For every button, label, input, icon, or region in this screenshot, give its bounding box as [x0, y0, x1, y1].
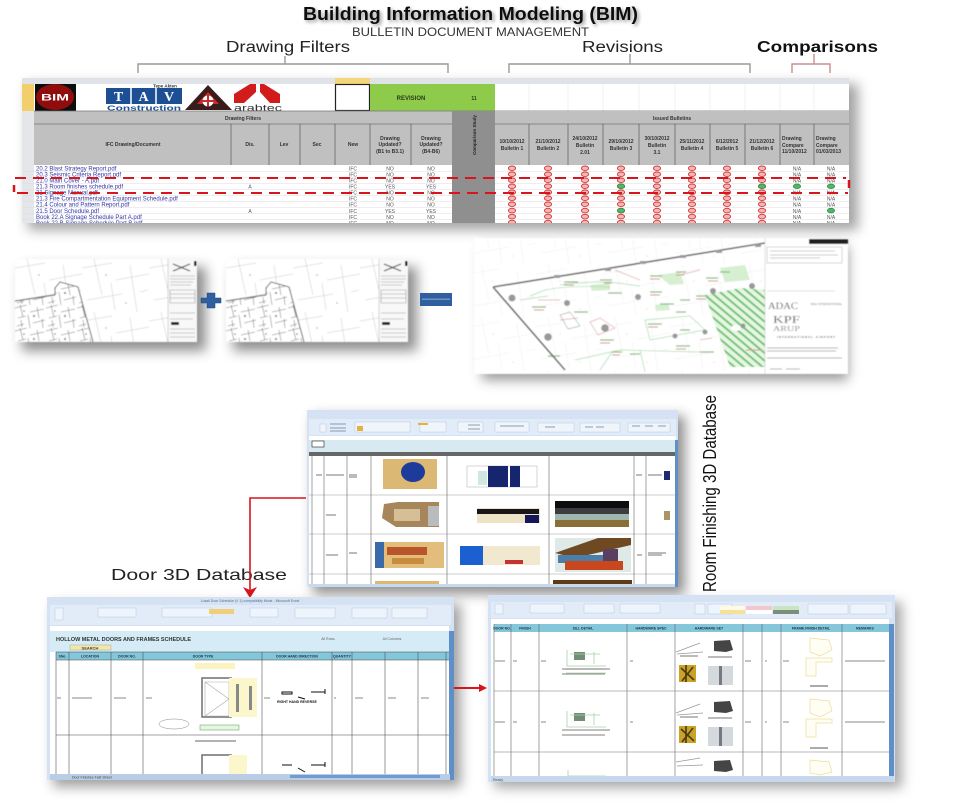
panel: room finishing spreadsheet: [307, 410, 685, 594]
title block: INTERNATIONAL AIRPORT: [777, 335, 835, 339]
table header: HARDWARE SET: [695, 626, 724, 630]
data rows: NO: [427, 196, 435, 202]
title block: BALI INTERNATIONAL: [811, 302, 842, 306]
room 3 images: [375, 538, 631, 572]
logo: CCC triangle: [185, 85, 232, 110]
data rows: 21.4 Colour and Pattern Report.pdf: [36, 202, 130, 208]
table header: issued bulletins: 21/10/2012: [535, 139, 561, 145]
table header: HARDWARE SPEC: [635, 626, 667, 630]
data rows: NO: [427, 166, 435, 172]
table header: issued bulletins: Bulletin 4: [681, 146, 703, 152]
data rows: IFC: [349, 178, 357, 184]
table header: drawing filters: Drawing: [380, 136, 400, 142]
panel: door schedule spreadsheet: Door Finishes Fast Street: [72, 776, 112, 780]
data rows: N/A: [793, 221, 802, 227]
data rows: Book 22.B Signage Schedule Part B.pdf: [36, 221, 143, 227]
heading: drawing filters with bracket: Drawing Filters: [226, 39, 350, 56]
data rows: N/A: [827, 190, 836, 196]
data rows: NO: [386, 215, 394, 221]
table header: issued bulletins: 6/12/2012: [716, 139, 738, 145]
panel: door finishes spreadsheet: Ready: [493, 778, 503, 782]
panel: door schedule spreadsheet: All Rows: [321, 637, 335, 641]
table header: DOOR HAND DIRECTION: [276, 654, 318, 658]
data rows: IFC: [349, 215, 357, 221]
door schedule title: HOLLOW METAL DOORS AND FRAMES SCHEDULE: [56, 637, 191, 643]
data rows: IFC: [349, 172, 357, 178]
title block: KPF: [773, 314, 800, 326]
green hatched area: [705, 288, 765, 367]
table header: issued bulletins: Bulletin: [648, 143, 666, 149]
data rows: IFC: [349, 202, 357, 208]
label: door 3D database: Door 3D Database: [111, 567, 287, 584]
logo: TAV Construction: A: [138, 90, 149, 105]
panel: door schedule spreadsheet: [47, 597, 461, 787]
logo: arabtec: [234, 84, 282, 114]
data rows: 21.5 Door Schedule.pdf: [36, 209, 99, 215]
heading: comparisons with bracket: [757, 39, 878, 73]
logo: TAV Construction: T: [114, 90, 124, 105]
data rows: IFC: [349, 190, 357, 196]
panel: bulletin spreadsheet: [14, 78, 858, 230]
icon: equals: [420, 293, 452, 306]
data rows: A: [248, 184, 252, 190]
panel: compared drawing result: [474, 238, 848, 380]
logo: arabtec: arabtec: [234, 103, 282, 114]
data rows: IFC: [349, 184, 357, 190]
table header: issued bulletins: 25/11/2012: [680, 139, 705, 145]
table header: drawing filters: Drawing: [421, 136, 441, 142]
table header: issued bulletins: Bulletin: [576, 143, 594, 149]
data rows: N/A: [793, 202, 802, 208]
data rows: N/A: [793, 196, 802, 202]
panel: door schedule spreadsheet: All Columns: [383, 637, 402, 641]
panel: door finishes spreadsheet: [488, 595, 902, 788]
arrow: door database to finish database: [454, 684, 487, 692]
panel: drawing A: [15, 259, 206, 351]
table header: issued bulletins: Bulletin 5: [716, 146, 738, 152]
table header: issued bulletins: 30/10/2012: [644, 136, 670, 142]
data rows: 21.0 Main Cover - A.pdf: [36, 178, 99, 184]
column: comparison study: [452, 111, 495, 223]
data rows: N/A: [827, 221, 836, 227]
table header: SNo: [58, 654, 66, 658]
table header: drawing filters: Sec: [313, 142, 322, 148]
revision box: 11: [471, 96, 477, 102]
heading: revisions with bracket: [509, 39, 750, 73]
table header: issued bulletins: Bulletin 3: [610, 146, 632, 152]
label: room finishing 3D database: Room Finishing 3D Database: [700, 395, 720, 592]
sill and frame details row 2: [562, 699, 832, 748]
data rows: NO: [386, 172, 394, 178]
data rows: N/A: [827, 215, 836, 221]
door hand direction symbols: RIGHT HAND REVERSE: [277, 700, 318, 704]
data rows: IFC: [349, 166, 357, 172]
room 1 images: [383, 459, 670, 489]
logo: TAV Construction: Construction: [107, 106, 181, 112]
data rows: N/A: [793, 215, 802, 221]
door hand direction symbols: [277, 689, 325, 772]
title: Building Information Modeling (BIM): [303, 4, 638, 24]
data rows: NO: [427, 221, 435, 227]
data rows: N/A: [827, 196, 836, 202]
table header: issued bulletins: 11/10/2012: [782, 149, 807, 155]
data rows: N/A: [793, 209, 802, 215]
icon: plus: [201, 293, 221, 308]
table header: DOOR NO.: [118, 654, 136, 658]
sill and frame details row 1: [562, 638, 832, 686]
table header: REMARKS: [856, 626, 875, 630]
table header: SILL DETAIL: [573, 626, 594, 630]
data rows: IFC: [349, 209, 357, 215]
subtitle: BULLETIN DOCUMENT MANAGEMENT: [352, 27, 589, 39]
data rows: Book 22.A Signage Schedule Part A.pdf: [36, 215, 142, 221]
data rows: N/A: [827, 178, 836, 184]
search box: [70, 645, 111, 650]
table header: drawing filters: [34, 111, 849, 165]
data rows: YES: [385, 184, 396, 190]
table header: issued bulletins: 10/10/2012: [499, 139, 525, 145]
revision box: REVISION: [397, 96, 425, 102]
data rows: NO: [386, 202, 394, 208]
heading: revisions with bracket: Revisions: [582, 39, 663, 56]
table header: DOOR NO.: [493, 626, 511, 630]
data rows: N/A: [793, 166, 802, 172]
table header: drawing filters: Updated?: [419, 142, 443, 148]
title block: ARUP: [773, 325, 800, 333]
revision box: [336, 84, 495, 111]
table header: drawing filters: Drawing Filters: [225, 116, 261, 122]
table header: DOOR TYPE: [193, 654, 214, 658]
data rows: 21.3 Room finishes schedule.pdf: [36, 184, 123, 190]
data rows: IFC: [349, 196, 357, 202]
data rows: A: [248, 209, 252, 215]
table header: LOCATION: [81, 654, 99, 658]
sill and frame details row 3: [568, 758, 832, 776]
logo: BIM: BIM: [41, 92, 69, 104]
heading: drawing filters with bracket: [138, 39, 448, 73]
data rows: NO: [427, 190, 435, 196]
site boundary: [493, 243, 765, 370]
logo: TAV Construction: [106, 84, 182, 112]
table header: issued bulletins: Issued Bulletins: [653, 116, 691, 122]
data rows: YES: [426, 209, 437, 215]
data rows: NO: [427, 178, 435, 184]
highlight: dashed red row marker: [14, 178, 849, 193]
data rows: IFC: [349, 221, 357, 227]
table header: drawing filters: IFC Drawing/Document: [105, 142, 161, 148]
data rows: N/A: [793, 190, 802, 196]
table header: issued bulletins: 3.1: [654, 150, 661, 156]
table header: drawing filters: (B4-B6): [422, 149, 440, 155]
data rows: NO: [386, 166, 394, 172]
table header: issued bulletins: Drawing: [816, 136, 836, 142]
room 4 images: [375, 580, 632, 584]
table header: issued bulletins: 24/10/2012: [572, 136, 598, 142]
data rows: N/A: [827, 166, 836, 172]
panel: door schedule spreadsheet: Lusail Door Schedule (V 1) compatibility Mode - Microsoft Excel: [201, 599, 300, 603]
title block: [765, 238, 848, 374]
data rows: N/A: [827, 172, 836, 178]
panel: drawing B: [226, 259, 417, 351]
data rows: N/A: [793, 172, 802, 178]
data rows: 20.2 Blast Strategy Report.pdf: [36, 166, 117, 172]
data rows: NO: [427, 172, 435, 178]
table header: issued bulletins: Drawing: [782, 136, 802, 142]
table header: drawing filters: Dis.: [245, 142, 255, 148]
heading: comparisons with bracket: Comparisons: [757, 39, 878, 56]
table header: FRAME FINISH DETAIL: [792, 626, 831, 630]
door elevation drawing: [159, 663, 257, 775]
data rows: 21 Signage Manual.pdf: [36, 190, 98, 196]
table header: [56, 652, 449, 660]
data rows: YES: [426, 184, 437, 190]
data rows: NO: [386, 196, 394, 202]
logo: BIM: [35, 84, 76, 111]
table header: drawing filters: New: [348, 142, 358, 148]
table header: drawing filters: (B1 to B3.1): [376, 149, 404, 155]
table header: issued bulletins: Bulletin 1: [501, 146, 523, 152]
title block: ADAC: [768, 301, 798, 311]
data rows: NO: [386, 178, 394, 184]
table header: issued bulletins: 21/12/2012: [749, 139, 775, 145]
data rows: [22, 166, 849, 227]
table header: issued bulletins: 2.01: [580, 150, 590, 156]
table header: issued bulletins: 29/10/2012: [608, 139, 634, 145]
table header: drawing filters: Lev: [280, 142, 289, 148]
table header: [493, 624, 889, 632]
table header: drawing filters: Updated?: [378, 142, 402, 148]
table header: issued bulletins: Compare: [782, 143, 804, 149]
data rows: 21.3 Fire Compartmentation Equipment Schedule.pdf: [36, 196, 178, 202]
table header: issued bulletins: Bulletin 6: [751, 146, 773, 152]
data rows: NO: [427, 202, 435, 208]
data rows: NO: [386, 221, 394, 227]
data rows: NO: [427, 215, 435, 221]
table header: issued bulletins: Compare: [816, 143, 838, 149]
table header: issued bulletins: 01/03/2013: [816, 149, 841, 155]
table header: issued bulletins: Bulletin 2: [537, 146, 559, 152]
logo: TAV Construction: V: [164, 90, 174, 105]
data rows: N/A: [827, 202, 836, 208]
table header: FINISH: [519, 626, 531, 630]
room 2 images: [382, 501, 670, 527]
data rows: NO: [386, 190, 394, 196]
table header: QUANTITY: [333, 654, 352, 658]
column: comparison study: Comparison Study: [472, 114, 477, 155]
table header: issued bulletins: [495, 111, 849, 165]
search box: SEARCH: [82, 646, 99, 650]
logo: TAV Construction: Tepe Akten: [153, 84, 177, 88]
data rows: N/A: [793, 178, 802, 184]
arrow: room finishing to door database: [243, 498, 306, 598]
data rows: YES: [385, 209, 396, 215]
data rows: 20.3 Seismic Criteria Report.pdf: [36, 172, 121, 178]
